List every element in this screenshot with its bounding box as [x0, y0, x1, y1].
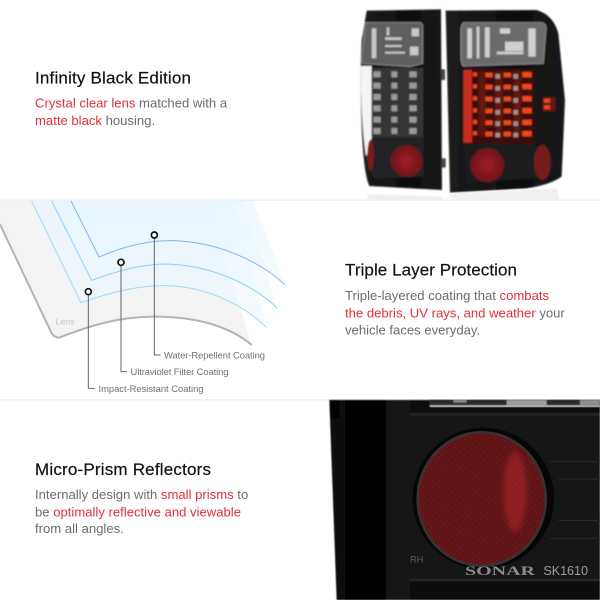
right tail light [446, 10, 565, 200]
text block: reflector description: be optimally reflective and viewable [35, 505, 241, 520]
lens diagram [0, 201, 285, 388]
heading: infinity black edition: Infinity Black Edition [35, 68, 191, 88]
label: impact-resistant coating: Impact-Resistant Coating [98, 383, 204, 394]
text block: coating description: the debris, UV rays, and weather your [345, 306, 565, 321]
ultraviolet filter layer [52, 201, 277, 308]
divider: bottom [0, 399, 600, 400]
label: water-repellent coating: Water-Repellent Coating [164, 350, 265, 360]
panel: micro-prism reflectors [35, 400, 600, 600]
clear lens edge [429, 400, 600, 407]
text block: coating description: vehicle faces everyday. [345, 322, 480, 338]
label: ultraviolet filter coating: Ultraviolet Filter Coating [130, 366, 228, 377]
mold text: RH: RH [410, 555, 423, 565]
housing [329, 400, 600, 600]
callout: water-repellent coating [151, 232, 161, 355]
callout: ultraviolet filter coating [118, 259, 127, 372]
housing ribs [550, 462, 600, 538]
left tail light [361, 9, 446, 200]
text block: reflector description: from all angles. [35, 521, 124, 536]
heading: triple layer protection: Triple Layer Protection [345, 261, 517, 280]
callout: impact-resistant coating [85, 289, 95, 388]
panel: triple layer protection [0, 201, 565, 394]
mold text: SK1610: SK1610 [543, 564, 588, 578]
product photo: reflector close-up [329, 400, 600, 600]
water-repellent layer [71, 201, 285, 285]
panel: infinity black edition [35, 9, 565, 200]
reflector [413, 428, 554, 569]
divider: top [0, 200, 600, 201]
text block: lens description: matte black housing. [35, 113, 155, 128]
text block: lens description: Crystal clear lens matched with a [35, 96, 227, 110]
impact-resistant layer [32, 201, 267, 328]
heading: micro-prism reflectors: Micro-Prism Reflectors [35, 460, 211, 479]
lens [0, 201, 252, 345]
text block: coating description: Triple-layered coating that combats [345, 288, 549, 303]
mold text: SONAR: SONAR [465, 564, 536, 578]
lens: Lens [56, 317, 75, 327]
product photo: tail lights [361, 9, 565, 200]
text block: reflector description: Internally design with small prisms to [35, 487, 248, 502]
